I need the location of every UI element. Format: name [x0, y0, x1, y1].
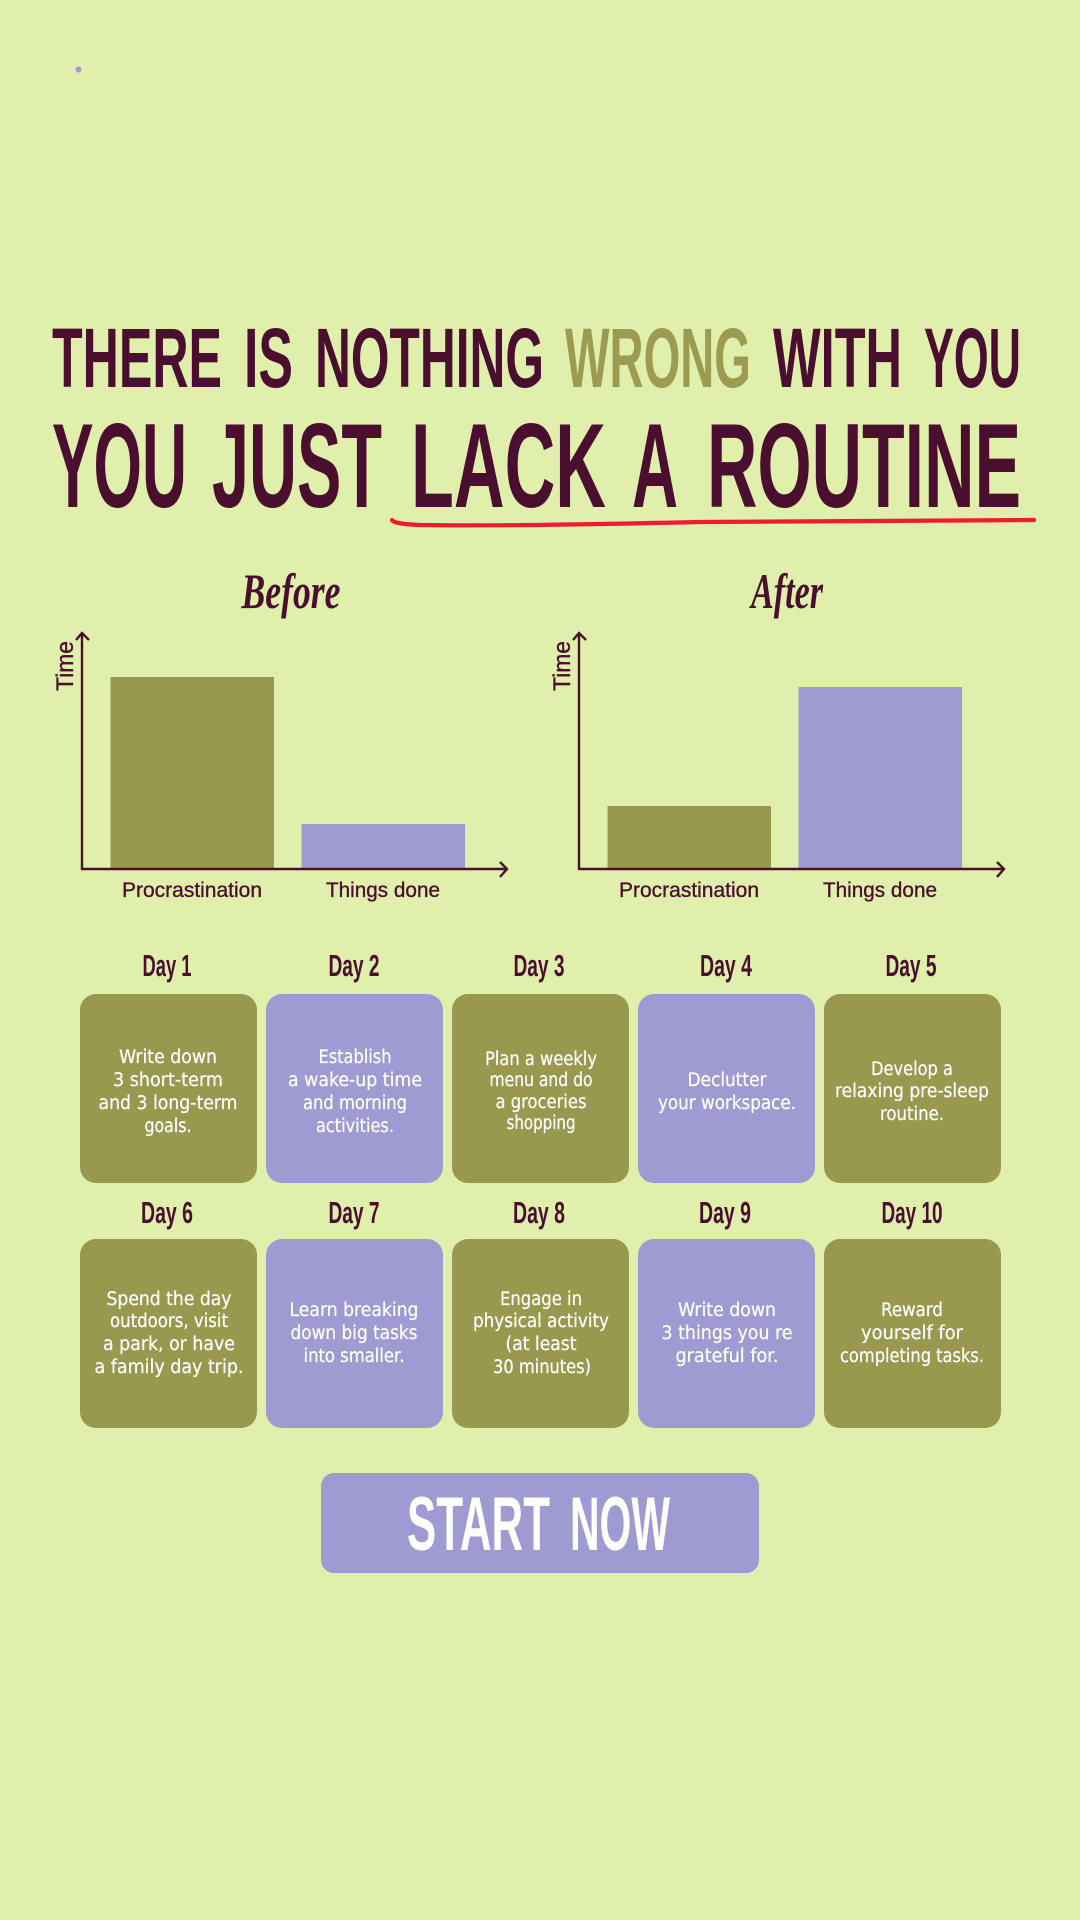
panel: day 5: relaxing pre-sleep [835, 1081, 989, 1102]
panel: day 6: Day 6 [141, 1195, 193, 1230]
panel: day 6: a park, or have [103, 1334, 235, 1355]
panel: day 3 [452, 948, 629, 1183]
panel: day 5 [824, 948, 1001, 1183]
panel: day 1 [80, 948, 257, 1183]
panel: day 7: down big tasks [290, 1323, 418, 1344]
headline line 1: WITH [773, 311, 902, 405]
bar: things done after [798, 687, 962, 869]
panel: day 9: Write down [678, 1300, 776, 1321]
headline line 2: JUST [212, 399, 382, 533]
panel: day 6: a family day trip. [94, 1357, 244, 1378]
red underline [392, 520, 1034, 525]
panel: day 3: Plan a weekly [485, 1049, 597, 1070]
panel: day 3: a groceries [496, 1092, 586, 1113]
panel: day 8: 30 minutes) [493, 1357, 591, 1378]
panel: day 6 [80, 1195, 257, 1428]
panel: day 4: your workspace. [658, 1093, 796, 1114]
headline line 1: IS [244, 311, 293, 405]
headline line 1: WRONG [565, 311, 751, 405]
panel: day 9: Day 9 [699, 1195, 751, 1230]
button: start now: START [407, 1482, 550, 1567]
panel: day 8 [452, 1195, 629, 1428]
panel: day 2: a wake-up time [288, 1070, 422, 1091]
x label: procrastination: Procrastination [619, 878, 759, 902]
panel: day 10: completing tasks. [840, 1346, 984, 1367]
y axis label: Time [549, 641, 576, 691]
panel: day 2: activities. [316, 1116, 394, 1137]
panel: day 6: outdoors, visit [110, 1311, 228, 1332]
chart axes [76, 633, 507, 877]
heading: after: After [749, 563, 823, 619]
headline line 2 [52, 399, 1021, 533]
y axis label: Time [52, 641, 79, 691]
panel: day 9: grateful for. [676, 1346, 778, 1367]
headline line 2: YOU [52, 399, 187, 533]
panel: day 10: yourself for [861, 1323, 963, 1344]
heading: before: Before [241, 563, 340, 619]
panel: after chart [549, 563, 1004, 902]
panel: day 8: Day 8 [513, 1195, 565, 1230]
headline line 1: THERE [52, 311, 222, 405]
panel: day 5: Day 5 [886, 948, 936, 983]
panel: day 2: Day 2 [328, 948, 380, 983]
panel: day 10 [824, 1195, 1001, 1428]
panel: day 7: Learn breaking [290, 1300, 418, 1321]
panel: day 1: Day 1 [142, 948, 192, 983]
panel: day 10: Day 10 [882, 1195, 942, 1230]
x label: things done: Things done [823, 878, 937, 902]
panel: day 5: routine. [880, 1104, 944, 1125]
panel: day 1: Write down [119, 1047, 217, 1068]
panel: day 8: physical activity [473, 1311, 609, 1332]
button: start now: NOW [570, 1482, 670, 1567]
headline line 1: NOTHING [315, 311, 544, 405]
panel: day 4 [638, 948, 815, 1183]
button: start now [321, 1473, 759, 1573]
panel: day 1: goals. [144, 1116, 192, 1137]
panel: day 7 [266, 1195, 443, 1428]
chart axes [573, 633, 1004, 877]
panel: day 9 [638, 1195, 815, 1428]
panel: day 3: shopping [506, 1113, 576, 1134]
panel: day 8: Engage in [500, 1289, 582, 1310]
bar: procrastination before [110, 677, 274, 869]
panel: day 10: Reward [881, 1300, 943, 1321]
panel: day 4: Declutter [688, 1070, 767, 1091]
panel: day 6: Spend the day [106, 1289, 232, 1310]
panel: day 2 [266, 948, 443, 1183]
panel: day 7: Day 7 [328, 1195, 380, 1230]
panel: day 2: Establish [318, 1047, 392, 1068]
panel: day 7: into smaller. [304, 1346, 404, 1367]
headline line 1 [52, 311, 1021, 405]
x label: procrastination: Procrastination [122, 878, 262, 902]
panel: day 9: 3 things you re [662, 1323, 792, 1344]
panel: day 3: menu and do [490, 1070, 592, 1091]
title [52, 311, 1034, 533]
bar: things done before [302, 824, 465, 869]
panel: day 8: (at least [506, 1334, 576, 1355]
headline line 2: A [632, 399, 678, 533]
panel: day 4: Day 4 [700, 948, 752, 983]
panel: day 1: and 3 long-term [98, 1093, 238, 1114]
panel: day 1: 3 short-term [113, 1070, 223, 1091]
panel: before chart [52, 563, 507, 902]
x label: things done: Things done [326, 878, 440, 902]
panel: day 3: Day 3 [514, 948, 564, 983]
panel: day 5: Develop a [871, 1059, 953, 1080]
bar: procrastination after [608, 806, 771, 869]
headline line 2: LACK [411, 399, 606, 533]
panel: day 2: and morning [303, 1093, 407, 1114]
decorative dot [76, 66, 82, 72]
